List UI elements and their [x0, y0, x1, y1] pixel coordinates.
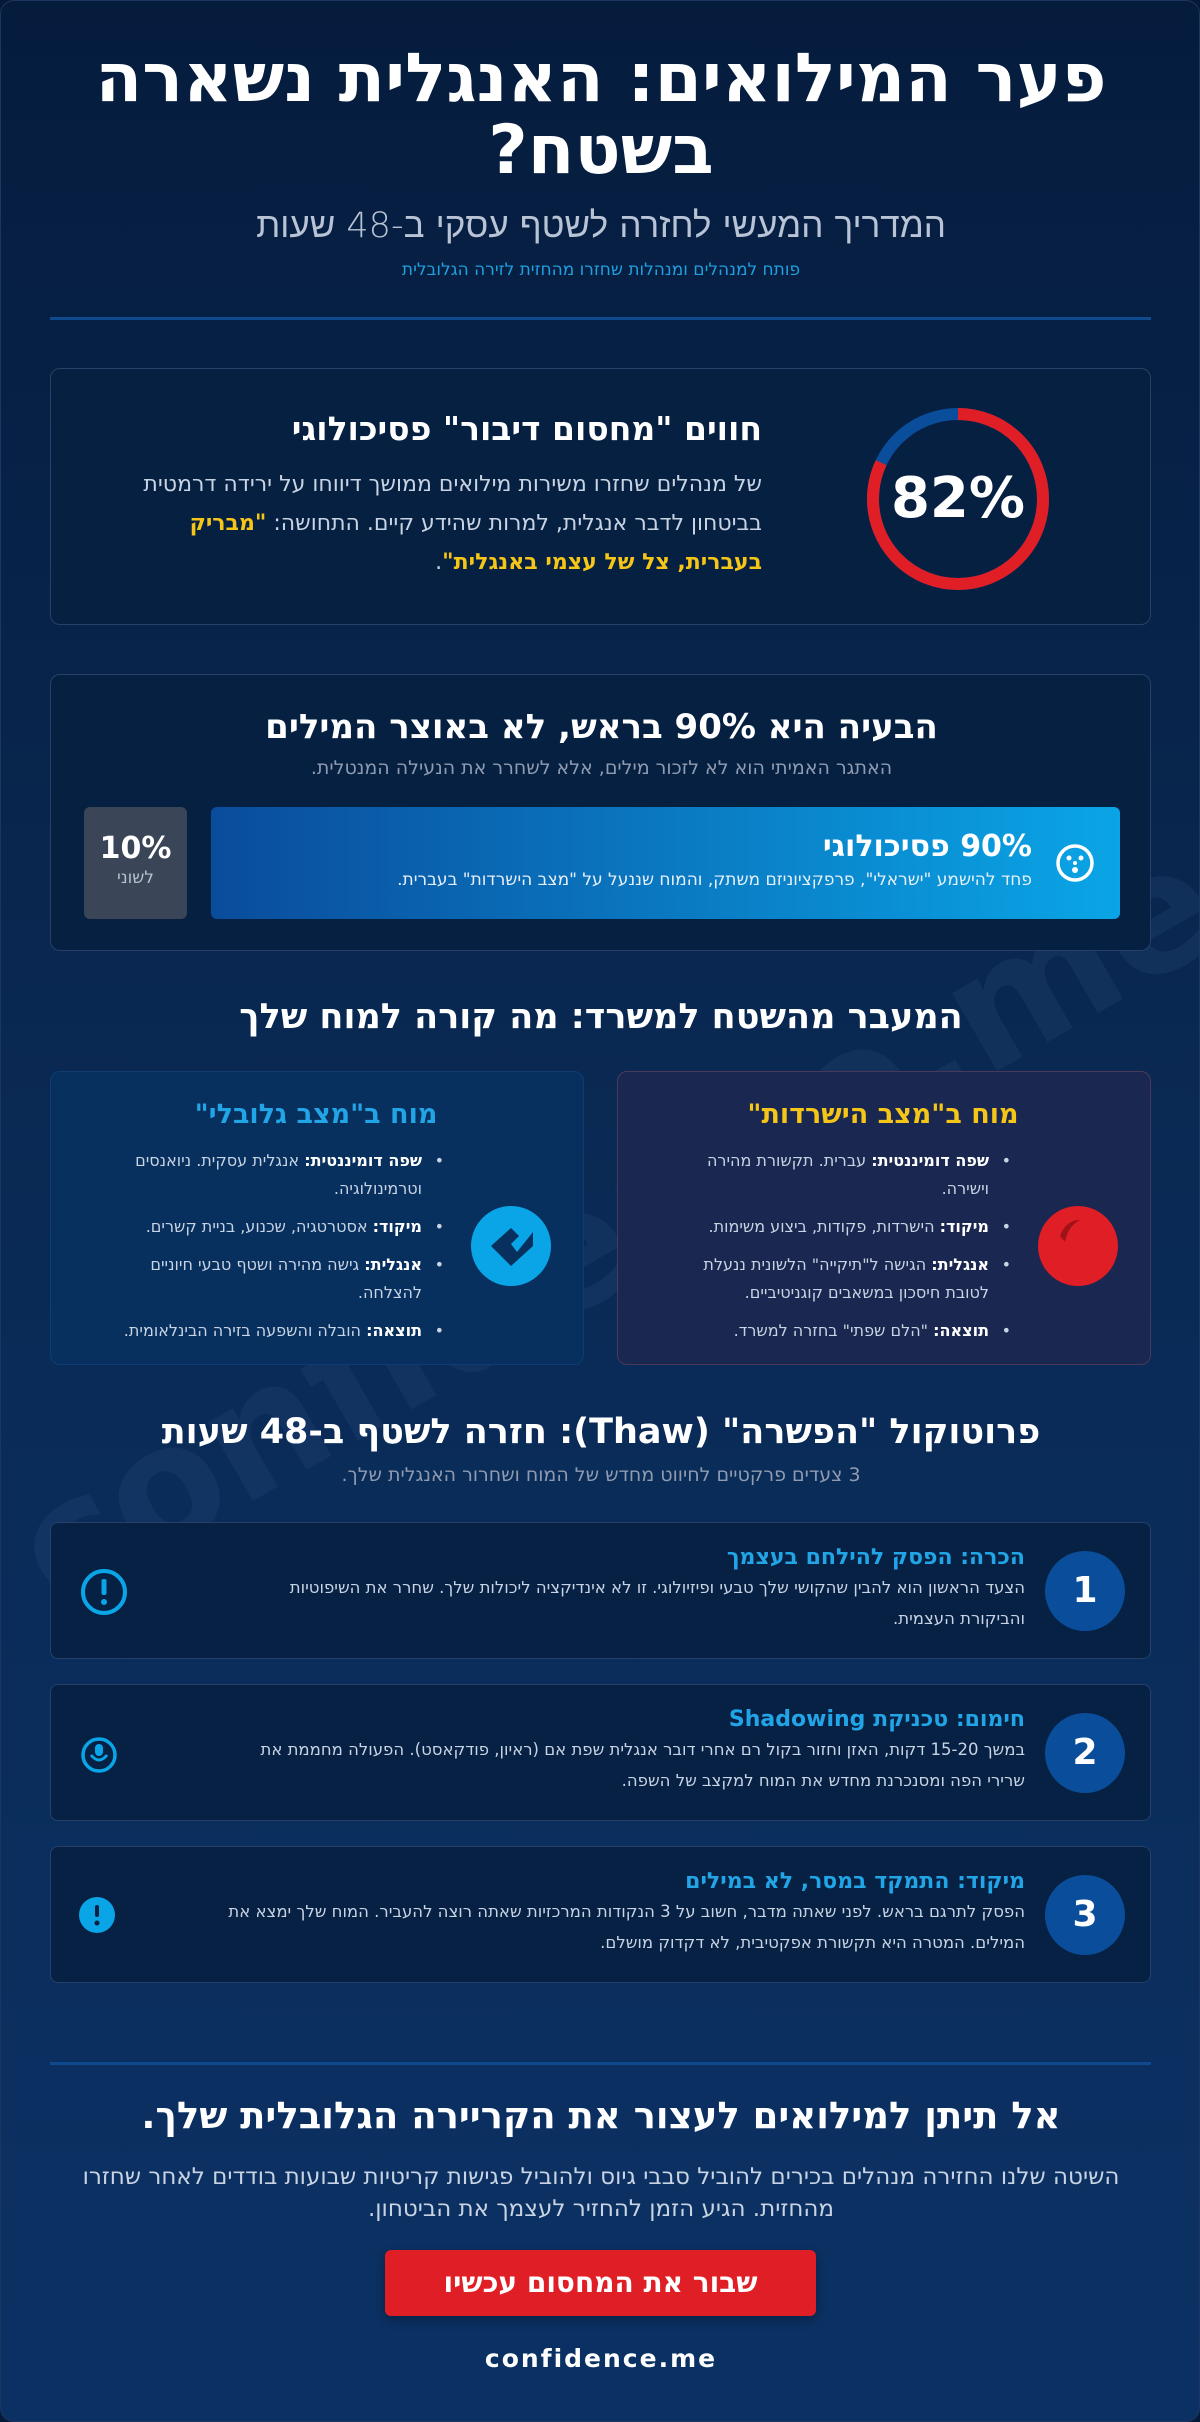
title: פער המילואים: האנגלית נשארה בשטח? — [95, 39, 1107, 190]
bar: 10% linguistic: לשוני — [117, 868, 154, 888]
icon: red ball — [1038, 1206, 1118, 1286]
subtitle: המדריך המעשי לחזרה לשטף עסקי ב-48 שעות — [256, 206, 946, 246]
CTA heading: אל תיתן למילואים לעצור את הקריירה הגלובלית שלך. — [141, 2094, 1061, 2137]
tagline: פותח למנהלים ומנהלות שחזרו מהחזית לזירה הגלובלית — [402, 260, 800, 280]
bar: 90% psychological: 90% פסיכולוגי — [823, 829, 1032, 864]
CTA button: שבור את המחסום עכשיו — [443, 2266, 758, 2299]
panel: 82% stat — [50, 368, 1151, 625]
icon: check badge — [471, 1206, 551, 1286]
heading: חווים "מחסום דיבור" פסיכולוגי — [292, 409, 762, 448]
subheading: האתגר האמיתי הוא לא לזכור מילים, אלא לשחרר את הנעילה המנטלית. — [311, 757, 892, 779]
icon: exclamation circle — [81, 1569, 127, 1615]
icon: face — [1056, 844, 1094, 882]
text block: בעברית, צל של עצמי באנגלית". — [435, 550, 762, 575]
panel: global mode: מוח ב"מצב גלובלי" — [195, 1099, 437, 1130]
panel: survival mode: תוצאה: "הלם שפתי" בחזרה למשרד. — [734, 1321, 989, 1340]
text block — [143, 472, 762, 575]
step 1: הצעד הראשון הוא להבין שהקושי שלך טבעי ופיזיולוגי. זו לא אינדיקציה ליכולות שלך. שחרר את השיפוטיות והביקורת העצמית. — [290, 1578, 1025, 1628]
panel: survival mode: מיקוד: הישרדות, פקודות, ביצוע משימות. — [708, 1217, 989, 1236]
step 1 — [50, 1522, 1151, 1659]
CTA text: השיטה שלנו החזירה מנהלים בכירים להוביל סבבי גיוס ולהוביל פגישות קריטיות שבועות בודדים לאחר שחזרו מהחזית. הגיע הזמן להחזיר לעצמך את הביטחון. — [83, 2164, 1119, 2222]
panel: survival mode: אנגלית: הגישה ל"תיקייה" הלשונית ננעלת לטובת חיסכון במשאבים קוגניטיביים. — [703, 1255, 989, 1302]
CTA button — [385, 2250, 816, 2316]
panel: survival mode: שפה דומיננטית: עברית. תקשורת מהירה וישירה. — [707, 1151, 989, 1198]
step 2: חימום: טכניקת Shadowing — [729, 1707, 1025, 1732]
step 3: מיקוד: התמקד במסר, לא במילים — [685, 1869, 1025, 1894]
step 3 — [50, 1846, 1151, 1983]
step 1: 1 — [1072, 1570, 1098, 1611]
icon: exclamation dot — [79, 1897, 115, 1933]
bar: 10% linguistic: 10% — [100, 831, 171, 866]
step 3: הפסק לתרגם בראש. לפני שאתה מדבר, חשוב על 3 הנקודות המרכזיות שאתה רוצה להעביר. המוח שלך ימצא את המילים. המטרה היא תקשורת אפקטיבית, לא דקדוק מושלם. — [228, 1902, 1025, 1952]
step 3: 3 — [1072, 1894, 1098, 1935]
donut chart 82% — [867, 408, 1049, 590]
heading: הבעיה היא 90% בראש, לא באוצר המילים — [265, 707, 938, 747]
protocol subheading: 3 צעדים פרקטיים לחיווט מחדש של המוח ושחרור האנגלית שלך. — [341, 1464, 861, 1486]
panel: global mode: שפה דומיננטית: אנגלית עסקית. ניואנסים וטרמינולוגיה. — [135, 1151, 422, 1198]
panel: global mode — [50, 1071, 584, 1365]
step 2: במשך 15-20 דקות, האזן וחזור בקול רם אחרי דובר אנגלית שפת אם (ראיון, פודקאסט). הפעולה מחממת את שרירי הפה ומסנכרנת מחדש את המוח למקצב של השפה. — [260, 1740, 1025, 1790]
panel: survival mode — [617, 1071, 1151, 1365]
donut chart 82%: 82% — [891, 466, 1025, 531]
bar: 90% psychological — [211, 807, 1120, 919]
icon: microphone — [81, 1737, 117, 1773]
step 1: הכרה: הפסק להילחם בעצמך — [727, 1545, 1025, 1570]
panel: 90% psychology — [50, 674, 1151, 951]
panel: global mode: אנגלית: גישה מהירה ושטף טבעי חיוניים להצלחה. — [150, 1255, 422, 1302]
section heading: brain: המעבר מהשטח למשרד: מה קורה למוח שלך — [239, 997, 963, 1037]
text block: של מנהלים שחזרו משירות מילואים ממושך דיווחו על ירידה דרמטית — [143, 472, 762, 497]
section heading: protocol: פרוטוקול "הפשרה" (Thaw): חזרה לשטף ב-48 שעות — [162, 1412, 1040, 1452]
panel: global mode: תוצאה: הובלה והשפעה בזירה הבינלאומית. — [124, 1321, 422, 1340]
step 2: 2 — [1072, 1732, 1098, 1773]
panel: global mode: מיקוד: אסטרטגיה, שכנוע, בניית קשרים. — [146, 1217, 422, 1236]
panel: survival mode: מוח ב"מצב הישרדות" — [747, 1099, 1019, 1130]
text block: בביטחון לדבר אנגלית, למרות שהידע קיים. התחושה: "מבריק — [190, 511, 762, 536]
bar: 10% linguistic — [84, 807, 187, 919]
bar: 90% psychological: פחד להישמע "ישראלי", פרפקציוניזם משתק, והמוח שננעל על "מצב הישרדות" בעברית. — [397, 870, 1032, 890]
step 2 — [50, 1684, 1151, 1821]
footer brand: confidence.me — [485, 2344, 717, 2373]
